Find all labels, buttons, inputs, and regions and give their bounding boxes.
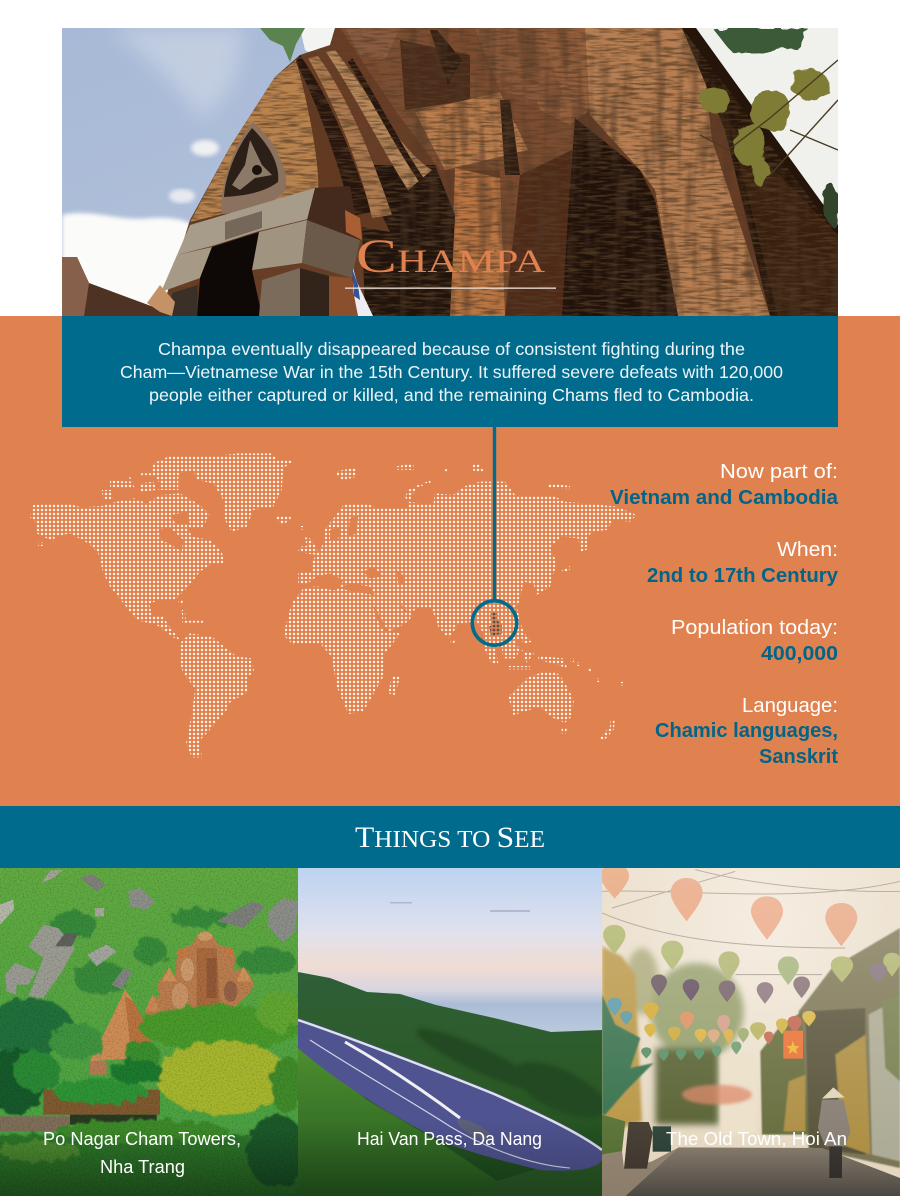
americas dots: [30, 453, 318, 758]
vietnam and cambodia highlighted dots: [489, 612, 502, 636]
flag: [352, 268, 373, 316]
pyramid tower: [90, 990, 154, 1075]
fact: when: When:: [777, 539, 838, 561]
potted plants: [602, 1115, 625, 1155]
planter: [653, 1126, 671, 1152]
darker hill shadows: [50, 908, 297, 995]
cyclist: [818, 1087, 850, 1178]
intro paragraph: Champa eventually disappeared because of consistent fighting during the: [158, 339, 745, 359]
main temple tower: [143, 931, 254, 1021]
fact: language: Language:: [742, 695, 838, 717]
undergrowth: [0, 1115, 307, 1196]
caption: Hai Van Pass, Da Nang: [357, 1129, 542, 1149]
vietnamese flag: [783, 1031, 803, 1059]
trash bin: [624, 1122, 653, 1169]
steps and pavement: [602, 1147, 679, 1196]
base of towers: [43, 1090, 160, 1115]
photo: Hai Van Pass: [298, 868, 614, 1196]
banana plant: [602, 995, 654, 1115]
brick course texture: [160, 28, 840, 316]
foliage texture: [0, 868, 298, 1196]
facts column: [610, 461, 839, 768]
distant clouds: [390, 902, 530, 912]
street: [625, 1147, 900, 1196]
fact: language: Sanskrit: [759, 746, 838, 768]
caption: Nha Trang: [100, 1157, 185, 1177]
bottom shading: [0, 1138, 298, 1196]
fact: population: 400,000: [761, 643, 838, 665]
pointer line from text box to map: [493, 427, 496, 602]
fact: population: Population today:: [671, 617, 838, 639]
fact: now part of: [610, 461, 839, 509]
winding road: [298, 1018, 602, 1171]
fact: when: 2nd to 17th Century: [647, 565, 839, 587]
fact: now part of: Now part of:: [720, 461, 838, 483]
brick tower mass: [160, 28, 838, 316]
fact: language: Chamic languages,: [655, 720, 838, 742]
bottom shading: [298, 1131, 602, 1196]
stone lintels and doorway: [161, 186, 362, 316]
hazy sky: [602, 868, 900, 1196]
lanterns: [600, 864, 900, 1061]
low wall: [0, 1116, 70, 1131]
photo: Old Town Hoi An: [600, 864, 900, 1196]
hero photo: Po Nagar tower: [62, 28, 840, 316]
trees: [625, 948, 744, 1125]
granite rocks: [0, 870, 298, 998]
fact: language: [655, 695, 838, 768]
fact: when: [647, 539, 839, 587]
caption: Po Nagar Cham Towers,: [43, 1129, 241, 1149]
palm leaf: [260, 28, 305, 62]
title: C HAMPA: [356, 230, 545, 283]
fact: population: [671, 617, 838, 665]
gable with arched ridges: [190, 50, 432, 232]
old world dots: [285, 464, 635, 740]
intro paragraph: Cham—Vietnamese War in the 15th Century. It suffered severe defeats with 120,000: [120, 362, 783, 382]
small ruin at lower left: [62, 257, 175, 316]
left building: [602, 946, 642, 1135]
photo: Po Nagar Cham Towers: [0, 868, 307, 1196]
intro paragraph: [120, 339, 783, 405]
fact: now part of: Vietnam and Cambodia: [610, 487, 839, 509]
right hillside: [498, 1160, 602, 1196]
foreground slope: [298, 1048, 498, 1196]
tree line highlights: [416, 1028, 602, 1117]
intro paragraph: people either captured or killed, and the remaining Chams fled to Cambodia.: [149, 385, 754, 405]
dawn sky and sea: [298, 868, 602, 1038]
location circle: [472, 601, 517, 645]
inland seas: [158, 512, 409, 632]
right buildings: [760, 928, 900, 1168]
teal intro panel: [62, 316, 838, 427]
forested hills: [298, 972, 602, 1196]
green hillside: [0, 868, 298, 1139]
orange background band: [0, 316, 900, 806]
yellow green trees: [53, 1041, 303, 1115]
things to see heading band: [0, 806, 900, 868]
sky: [62, 28, 838, 257]
upper tree canopy: [0, 991, 303, 1115]
things to see heading band: THINGS TO SEE: [355, 821, 545, 854]
distant glow and bunting: [682, 1055, 757, 1135]
caption: The Old Town, Hoi An: [666, 1129, 847, 1149]
street wires: [602, 870, 900, 975]
atmospheric haze: [602, 868, 900, 1196]
carved niche: [221, 122, 286, 214]
world dot map: [20, 440, 640, 770]
caption: [43, 1129, 241, 1177]
tree branches at right: [699, 28, 840, 225]
